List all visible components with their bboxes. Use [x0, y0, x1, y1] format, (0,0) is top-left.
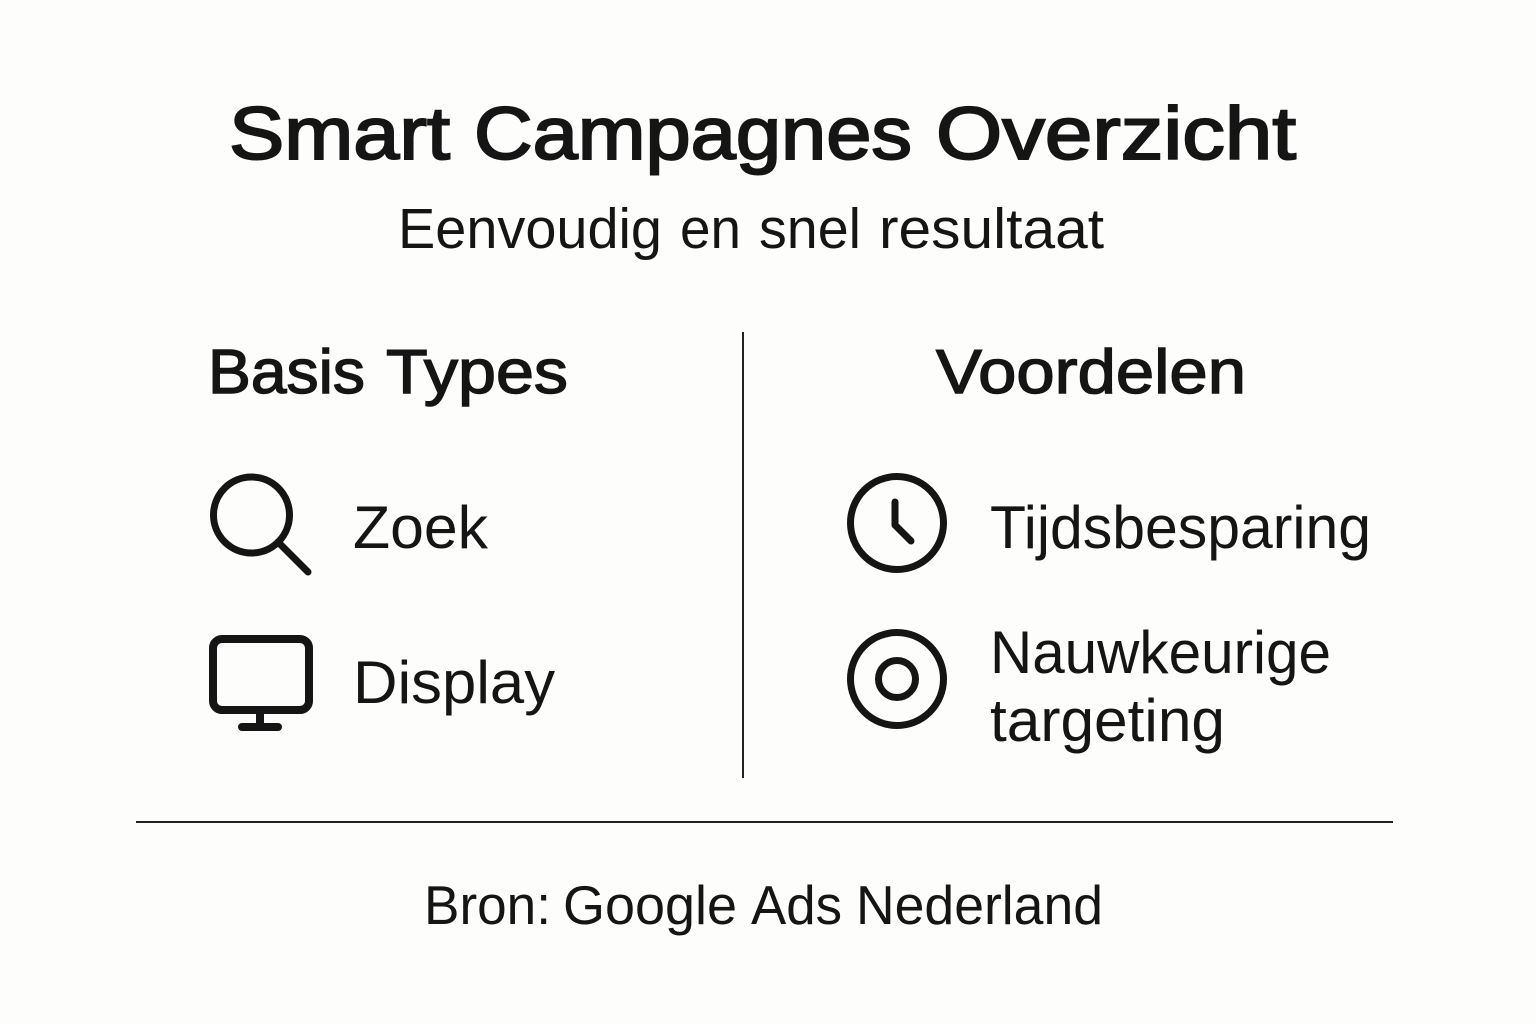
icon: clock — [850, 476, 944, 570]
label: Display: Display — [353, 649, 555, 716]
label: Nauwkeurige targeting — [990, 619, 1331, 754]
subtitle: resultaat — [879, 197, 1104, 261]
title: Smart — [229, 92, 450, 175]
source: Nederland — [856, 874, 1103, 936]
heading: Voordelen: Voordelen — [936, 338, 1246, 407]
source: Google — [563, 874, 737, 936]
icon: monitor — [213, 639, 309, 727]
subtitle: Eenvoudig — [398, 197, 662, 261]
label: Nauwkeurige targeting: Nauwkeurige — [990, 619, 1331, 686]
label: Tijdsbesparing: Tijdsbesparing — [990, 494, 1371, 561]
source: Ads — [751, 874, 842, 936]
label: Nauwkeurige targeting: targeting — [990, 687, 1225, 754]
horizontal divider — [136, 821, 1393, 823]
heading: Basis Types: Basis — [208, 338, 365, 407]
title: Overzicht — [936, 92, 1297, 175]
vertical divider — [742, 332, 744, 778]
heading: Basis Types — [208, 338, 568, 407]
subtitle — [398, 197, 1104, 261]
source — [424, 874, 1103, 936]
source: Bron: — [424, 874, 551, 936]
title — [229, 92, 1297, 175]
icon: magnifying glass — [214, 477, 308, 572]
icon: target — [850, 632, 944, 726]
subtitle: snel — [759, 197, 861, 261]
heading: Basis Types: Types — [386, 338, 568, 407]
title: Campagnes — [474, 92, 912, 175]
subtitle: en — [680, 197, 741, 261]
label: Zoek: Zoek — [353, 494, 489, 561]
